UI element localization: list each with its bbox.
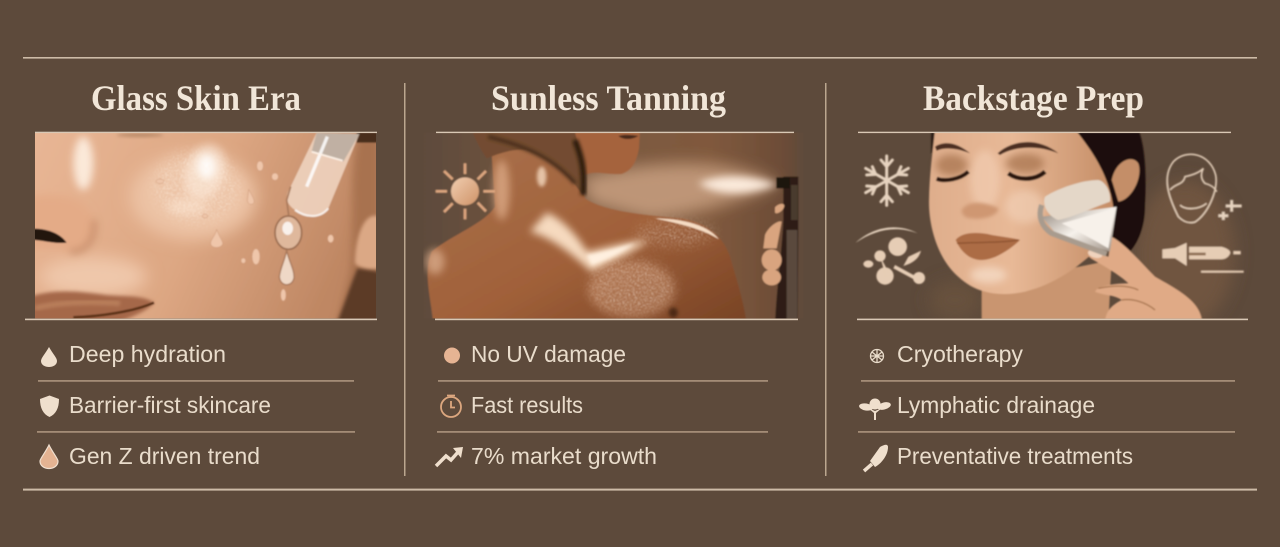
- panel: sunless tanning: [420, 78, 807, 469]
- lips: [956, 233, 1020, 260]
- list item: Preventative treatments: [864, 443, 1133, 471]
- icon: lymphatic nodes: [856, 227, 925, 285]
- roller: [1040, 180, 1117, 254]
- hair: [472, 129, 584, 197]
- label: Barrier-first skincare: [69, 392, 271, 418]
- icon: sun: [436, 163, 495, 219]
- icon: roller device: [864, 445, 888, 471]
- bottle: [775, 177, 798, 323]
- icon: stopwatch: [441, 396, 461, 417]
- panel: backstage prep: [856, 78, 1248, 471]
- label: Gen Z driven trend: [69, 443, 260, 469]
- label: Lymphatic drainage: [897, 392, 1095, 418]
- rule under heading: [436, 132, 794, 133]
- icon: water drop: [41, 347, 57, 367]
- neck and shoulders: [428, 147, 747, 323]
- column divider left: [404, 83, 406, 476]
- rule under heading: [858, 132, 1231, 133]
- divider: [861, 380, 1235, 382]
- rule under photo: [435, 319, 798, 320]
- neck: [982, 260, 1112, 323]
- label: No UV damage: [471, 341, 626, 367]
- label: Fast results: [471, 392, 583, 418]
- icon: shield: [40, 396, 59, 417]
- heading: Sunless Tanning: Sunless Tanning: [491, 78, 726, 118]
- heading: Glass Skin Era: Glass Skin Era: [91, 78, 301, 118]
- droplets: [156, 161, 334, 301]
- icon: growth arrow: [436, 447, 463, 466]
- divider: [38, 380, 354, 382]
- icon: dot: [444, 348, 460, 364]
- label: Preventative treatments: [897, 443, 1133, 469]
- photo: face with serum dropper: [30, 129, 380, 323]
- icon: face outline: [1167, 154, 1242, 223]
- hand: [762, 204, 784, 285]
- divider: [437, 431, 768, 433]
- rule under photo: [25, 319, 377, 320]
- list item: Fast results: [441, 392, 583, 418]
- list item: Cryotherapy: [870, 341, 1023, 367]
- rule under photo: [857, 319, 1248, 320]
- divider: [37, 431, 355, 433]
- ear: [1112, 159, 1140, 202]
- bottom rule: [23, 489, 1257, 491]
- hair: [1078, 133, 1146, 251]
- icon: treatment device: [1162, 243, 1244, 273]
- label: Cryotherapy: [897, 341, 1023, 367]
- list item: No UV damage: [444, 341, 626, 367]
- nose: [962, 203, 998, 219]
- list item: 7% market growth: [436, 443, 657, 469]
- dropper: [287, 133, 359, 216]
- hand: [1088, 237, 1202, 323]
- icon: snow crystal: [870, 350, 884, 362]
- icon: peach drop: [40, 445, 58, 468]
- list item: Barrier-first skincare: [40, 392, 271, 418]
- rule under heading: [35, 132, 377, 133]
- infographic canvas: [23, 57, 1257, 491]
- icon: snowflake: [866, 156, 908, 205]
- photo: face with cryo roller: [856, 129, 1244, 327]
- top rule: [23, 57, 1257, 59]
- heading: Backstage Prep: Backstage Prep: [923, 78, 1144, 118]
- label: 7% market growth: [471, 443, 657, 469]
- photo: back being spray tanned: [420, 129, 807, 323]
- column divider right: [825, 83, 826, 476]
- label: Deep hydration: [69, 341, 226, 367]
- divider: [858, 431, 1235, 433]
- panel: glass skin: [25, 78, 380, 469]
- list item: Lymphatic drainage: [858, 392, 1095, 420]
- spray mist: [582, 164, 777, 220]
- eyes and brows: [936, 154, 968, 176]
- face: [929, 129, 1113, 294]
- list item: Gen Z driven trend: [40, 443, 260, 469]
- list item: Deep hydration: [41, 341, 226, 367]
- divider: [438, 380, 768, 382]
- highlights: [494, 160, 510, 220]
- head: [574, 133, 640, 175]
- icon: lymph flower: [858, 398, 892, 420]
